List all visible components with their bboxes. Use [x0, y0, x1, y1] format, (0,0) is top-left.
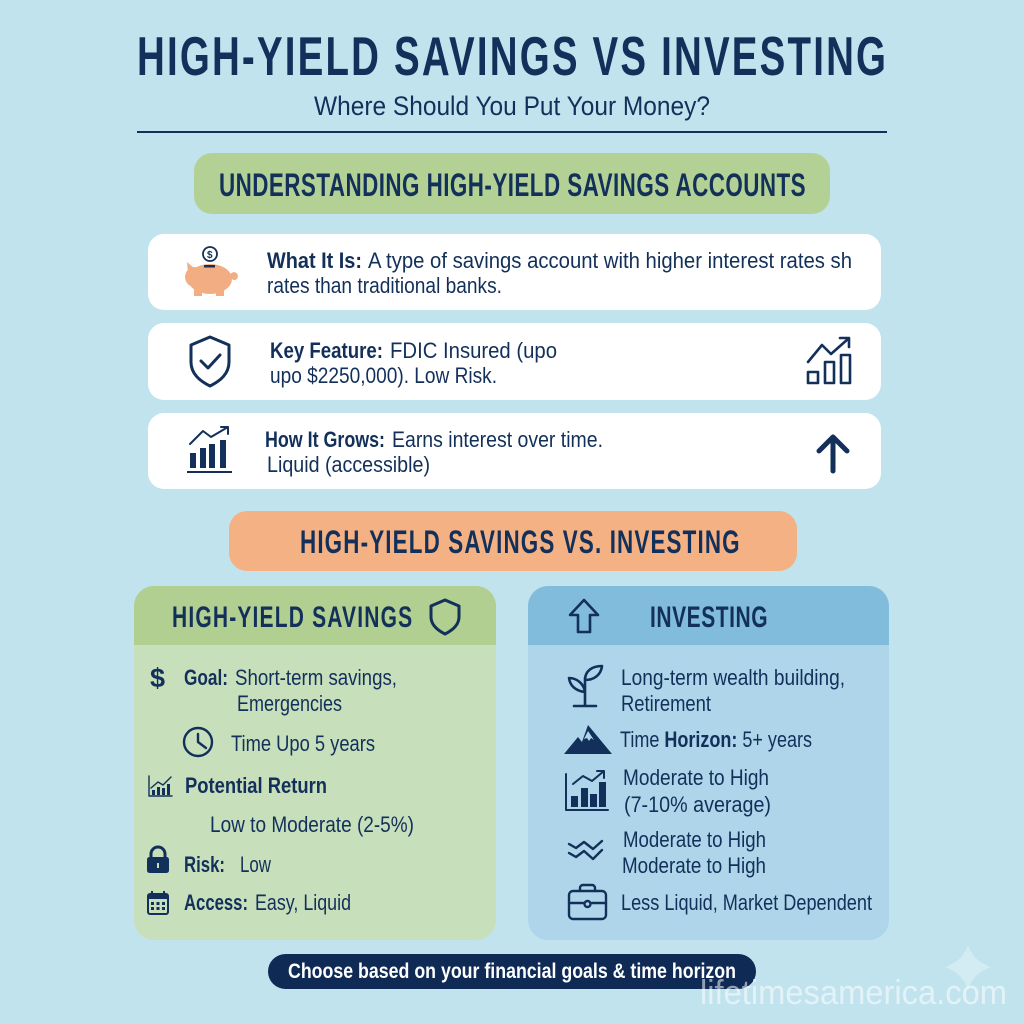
access text: Less Liquid, Market Dependent — [621, 890, 873, 915]
subtitle: Where Should You Put Your Money? — [314, 91, 710, 121]
title: HIGH-YIELD SAVINGS VS INVESTING — [137, 26, 886, 88]
access value: Easy, Liquid — [255, 890, 351, 915]
long-term line 2: Retirement — [621, 691, 712, 716]
savings heading: HIGH-YIELD SAVINGS — [172, 602, 412, 634]
panel: what it is — [148, 234, 881, 310]
potential return value: Low to Moderate (2-5%) — [210, 812, 414, 837]
label: what it is: What It Is: — [267, 248, 362, 273]
section heading: comparison: HIGH-YIELD SAVINGS VS. INVESTING — [300, 524, 740, 560]
potential return label: Potential Return — [185, 773, 327, 798]
icon: briefcase — [569, 885, 606, 919]
panel: high-yield savings — [134, 586, 496, 940]
description line 1: A type of savings account with higher interest rates sh — [368, 248, 852, 273]
icon: lock — [147, 847, 169, 873]
investing heading: INVESTING — [650, 602, 768, 634]
icon: up arrow — [819, 437, 847, 471]
panel: how it grows — [148, 413, 881, 489]
goal value line 2: Emergencies — [237, 691, 342, 716]
icon: dollar: $ — [150, 663, 165, 693]
risk value: Low — [240, 852, 272, 877]
section heading: understanding — [194, 153, 830, 214]
section heading: understanding: UNDERSTANDING HIGH-YIELD SAVINGS ACCOUNTS — [219, 167, 806, 203]
icon: shield — [431, 600, 459, 634]
icon: mountains — [564, 725, 612, 754]
grows text line 1: Earns interest over time. — [392, 427, 603, 452]
footer callout — [268, 954, 756, 989]
risk label: Risk: — [184, 852, 225, 877]
section heading: comparison — [229, 511, 797, 571]
watermark: lifetimesamerica.com — [700, 974, 1007, 1012]
icon: waves — [569, 841, 602, 859]
feature text line 1: FDIC Insured (upo — [390, 338, 557, 363]
icon: small chart — [149, 776, 172, 796]
return line 1: Moderate to High — [623, 765, 769, 790]
time horizon: Time Horizon: 5+ years — [620, 727, 812, 752]
long-term line 1: Long-term wealth building, — [621, 665, 845, 690]
icon: outline up arrow — [570, 600, 598, 632]
panel: investing — [528, 586, 889, 940]
icon: calendar — [148, 891, 168, 914]
risk line 1: Moderate to High — [623, 827, 766, 852]
panel: key feature — [148, 323, 881, 400]
icon: piggy bank: $ — [207, 250, 213, 261]
return line 2: (7-10% average) — [624, 792, 771, 817]
goal label: Goal: — [184, 665, 228, 690]
icon: sprout — [569, 666, 602, 706]
icon: clock — [184, 728, 212, 756]
label: key feature: Key Feature: — [270, 338, 383, 363]
icon: piggy bank — [185, 247, 238, 296]
icon: bar chart with arrow — [187, 427, 232, 473]
goal value: Short-term savings, — [235, 665, 397, 690]
icon: shield check — [191, 337, 229, 386]
feature text line 2: upo $2250,000). Low Risk. — [270, 363, 497, 388]
footer callout: Choose based on your financial goals & time horizon — [288, 960, 736, 983]
time horizon: Time Upo 5 years — [231, 731, 375, 756]
label: how it grows: How It Grows: — [265, 427, 385, 452]
grows text line 2: Liquid (accessible) — [267, 452, 430, 477]
icon: investing chart — [566, 771, 608, 810]
risk line 2: Moderate to High — [622, 853, 766, 878]
access label: Access: — [184, 890, 248, 915]
icon: growth chart outline — [808, 338, 850, 383]
icon: sparkle — [945, 945, 991, 990]
description line 2: rates than traditional banks. — [267, 273, 502, 298]
